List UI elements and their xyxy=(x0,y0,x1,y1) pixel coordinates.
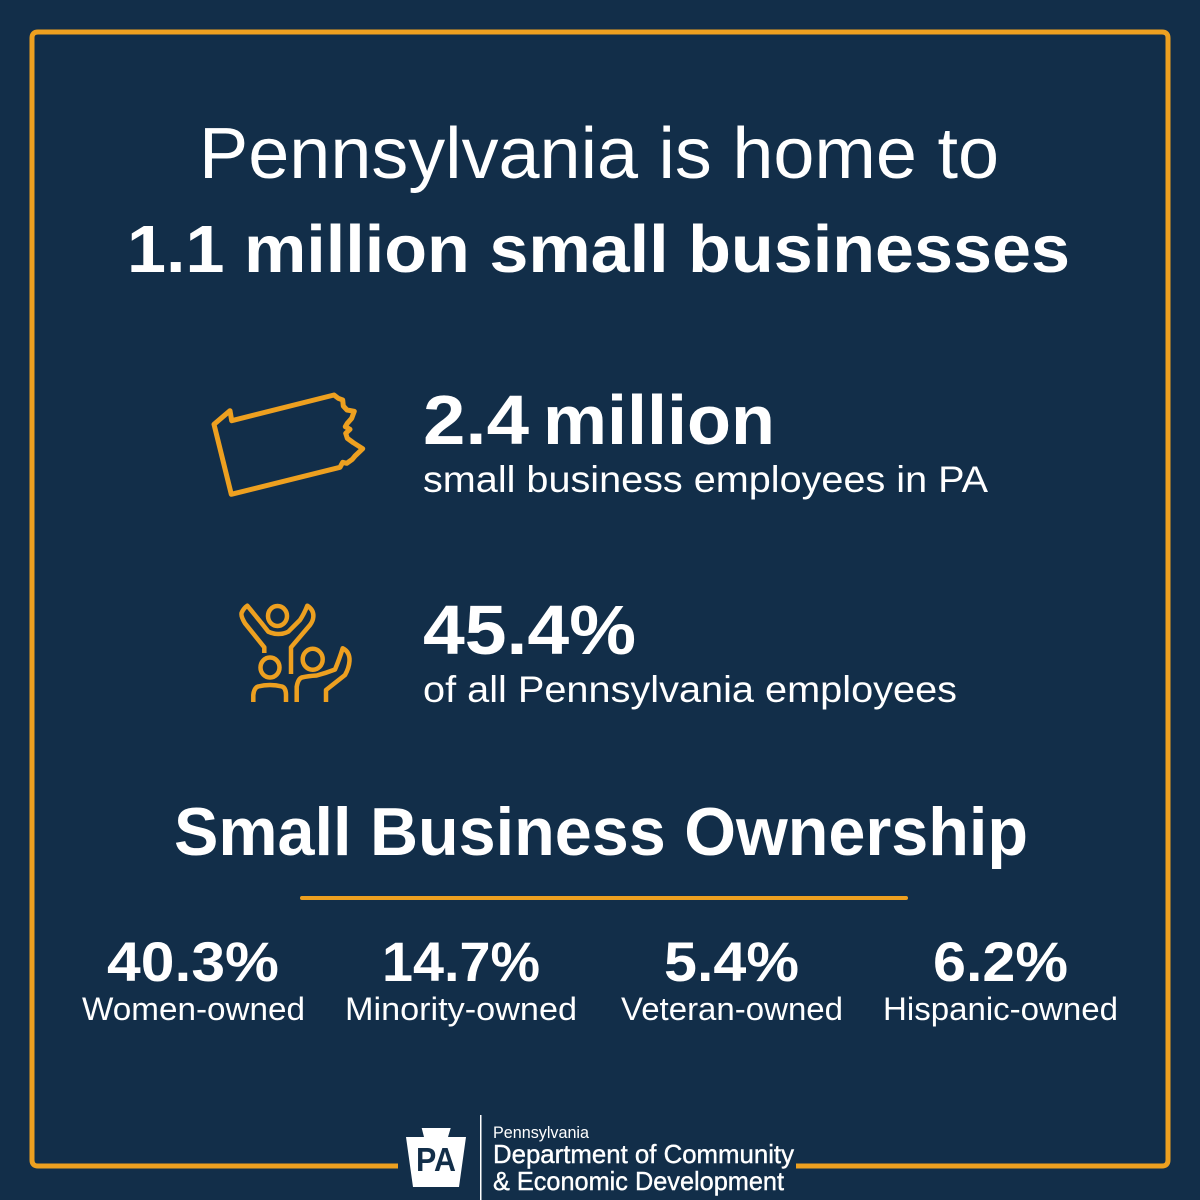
stat: women-owned: 40.3% xyxy=(107,930,279,993)
stat: hispanic-owned: 6.2% xyxy=(933,930,1068,993)
stat: share of employees xyxy=(423,591,957,710)
stat: women-owned xyxy=(82,930,305,1027)
stat: hispanic-owned xyxy=(883,930,1118,1027)
stat: minority-owned xyxy=(345,930,577,1027)
logo: PA keystone: PA xyxy=(416,1141,456,1178)
stat: women-owned: Women-owned xyxy=(82,991,305,1027)
icon: Pennsylvania outline xyxy=(214,395,363,494)
stat: veteran-owned: 5.4% xyxy=(664,930,799,993)
stat: share of employees: 45.4% xyxy=(423,591,636,669)
stat: employees: million xyxy=(543,381,775,459)
stat: veteran-owned xyxy=(621,930,843,1027)
stat: employees xyxy=(423,381,988,500)
logo text xyxy=(493,1123,794,1196)
icon: cheering people xyxy=(241,606,350,702)
logo text: & Economic Development xyxy=(493,1166,785,1196)
divider line xyxy=(300,896,908,900)
heading: ownership: Small Business Ownership xyxy=(174,794,1028,870)
title: Pennsylvania is home to xyxy=(199,114,999,194)
stat: share of employees: of all Pennsylvania employees xyxy=(423,669,957,710)
logo text: Department of Community xyxy=(493,1139,794,1169)
title xyxy=(127,114,1070,287)
logo: PA keystone xyxy=(406,1128,466,1187)
stat: minority-owned: Minority-owned xyxy=(345,991,577,1027)
stat: employees: 2.4 xyxy=(423,381,529,459)
stat: veteran-owned: Veteran-owned xyxy=(621,991,843,1027)
logo divider xyxy=(480,1115,482,1200)
stat: employees: small business employees in PA xyxy=(423,459,988,500)
logo text: Pennsylvania xyxy=(493,1123,590,1142)
stat: minority-owned: 14.7% xyxy=(382,930,540,993)
stat: hispanic-owned: Hispanic-owned xyxy=(883,991,1118,1027)
title: 1.1 million small businesses xyxy=(127,212,1070,287)
